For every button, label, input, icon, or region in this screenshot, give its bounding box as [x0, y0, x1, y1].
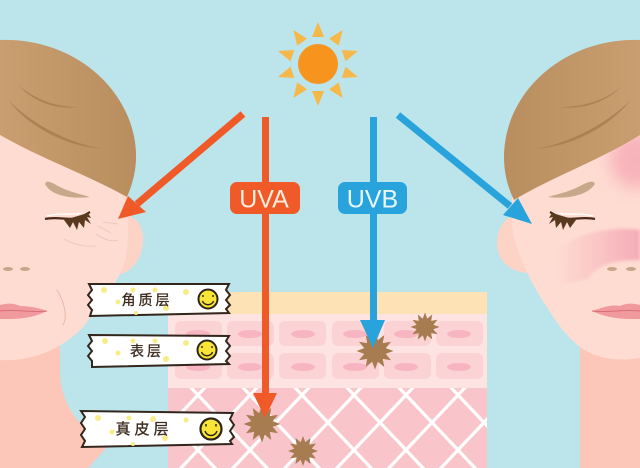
- arrow: UVA to left face: [118, 111, 245, 219]
- label: stratum corneum tape: 角质层: [122, 292, 172, 308]
- forehead blush: [610, 132, 640, 188]
- closed eye with lashes: [45, 212, 91, 230]
- panel: skin cross-section: [168, 292, 487, 468]
- panel: right face with redness: [497, 40, 640, 468]
- arrow: UVB into epidermis: [360, 117, 385, 348]
- melanin spots: [244, 312, 440, 466]
- label: dermis tape: 真皮层: [115, 420, 173, 438]
- closed eye with lashes: [549, 212, 595, 230]
- neck: [580, 340, 640, 468]
- cell nuclei: [186, 330, 471, 371]
- hair: [0, 40, 136, 197]
- label: epidermis tape: [88, 335, 230, 367]
- lips: [592, 304, 640, 319]
- lips: [0, 304, 47, 319]
- label: dermis tape: [81, 411, 234, 447]
- label: stratum corneum tape: [88, 284, 230, 316]
- cheek line: [57, 290, 65, 325]
- panel: left face with wrinkles: [0, 40, 143, 468]
- ear: [112, 216, 143, 275]
- stratum corneum layer: [172, 292, 487, 314]
- arrow: UVB to right face: [396, 112, 532, 224]
- epidermis cells: [175, 321, 483, 379]
- neck: [0, 340, 108, 468]
- wrinkles: [64, 222, 118, 246]
- label: epidermis tape: 表层: [130, 343, 164, 359]
- eyebrow: [548, 182, 595, 198]
- hair strands: [8, 85, 102, 149]
- arrow: UVA into dermis: [253, 117, 277, 418]
- label: UVA: [230, 182, 300, 214]
- icon: sun: [276, 22, 360, 106]
- face skin: [512, 130, 640, 360]
- label: UVA: UVA: [239, 186, 289, 214]
- cheek redness band: [556, 229, 640, 285]
- nose: [607, 267, 636, 271]
- face skin: [0, 130, 128, 360]
- label: UVB: [338, 182, 407, 214]
- hair strands: [536, 86, 631, 149]
- dermis fibre lattice: [168, 388, 487, 468]
- dermis layer: [168, 388, 487, 468]
- label: UVB: UVB: [347, 186, 398, 214]
- ear: [497, 216, 529, 273]
- eyebrow: [45, 182, 90, 198]
- epidermis layer: [168, 314, 487, 388]
- hair: [504, 40, 640, 200]
- nose: [3, 267, 30, 271]
